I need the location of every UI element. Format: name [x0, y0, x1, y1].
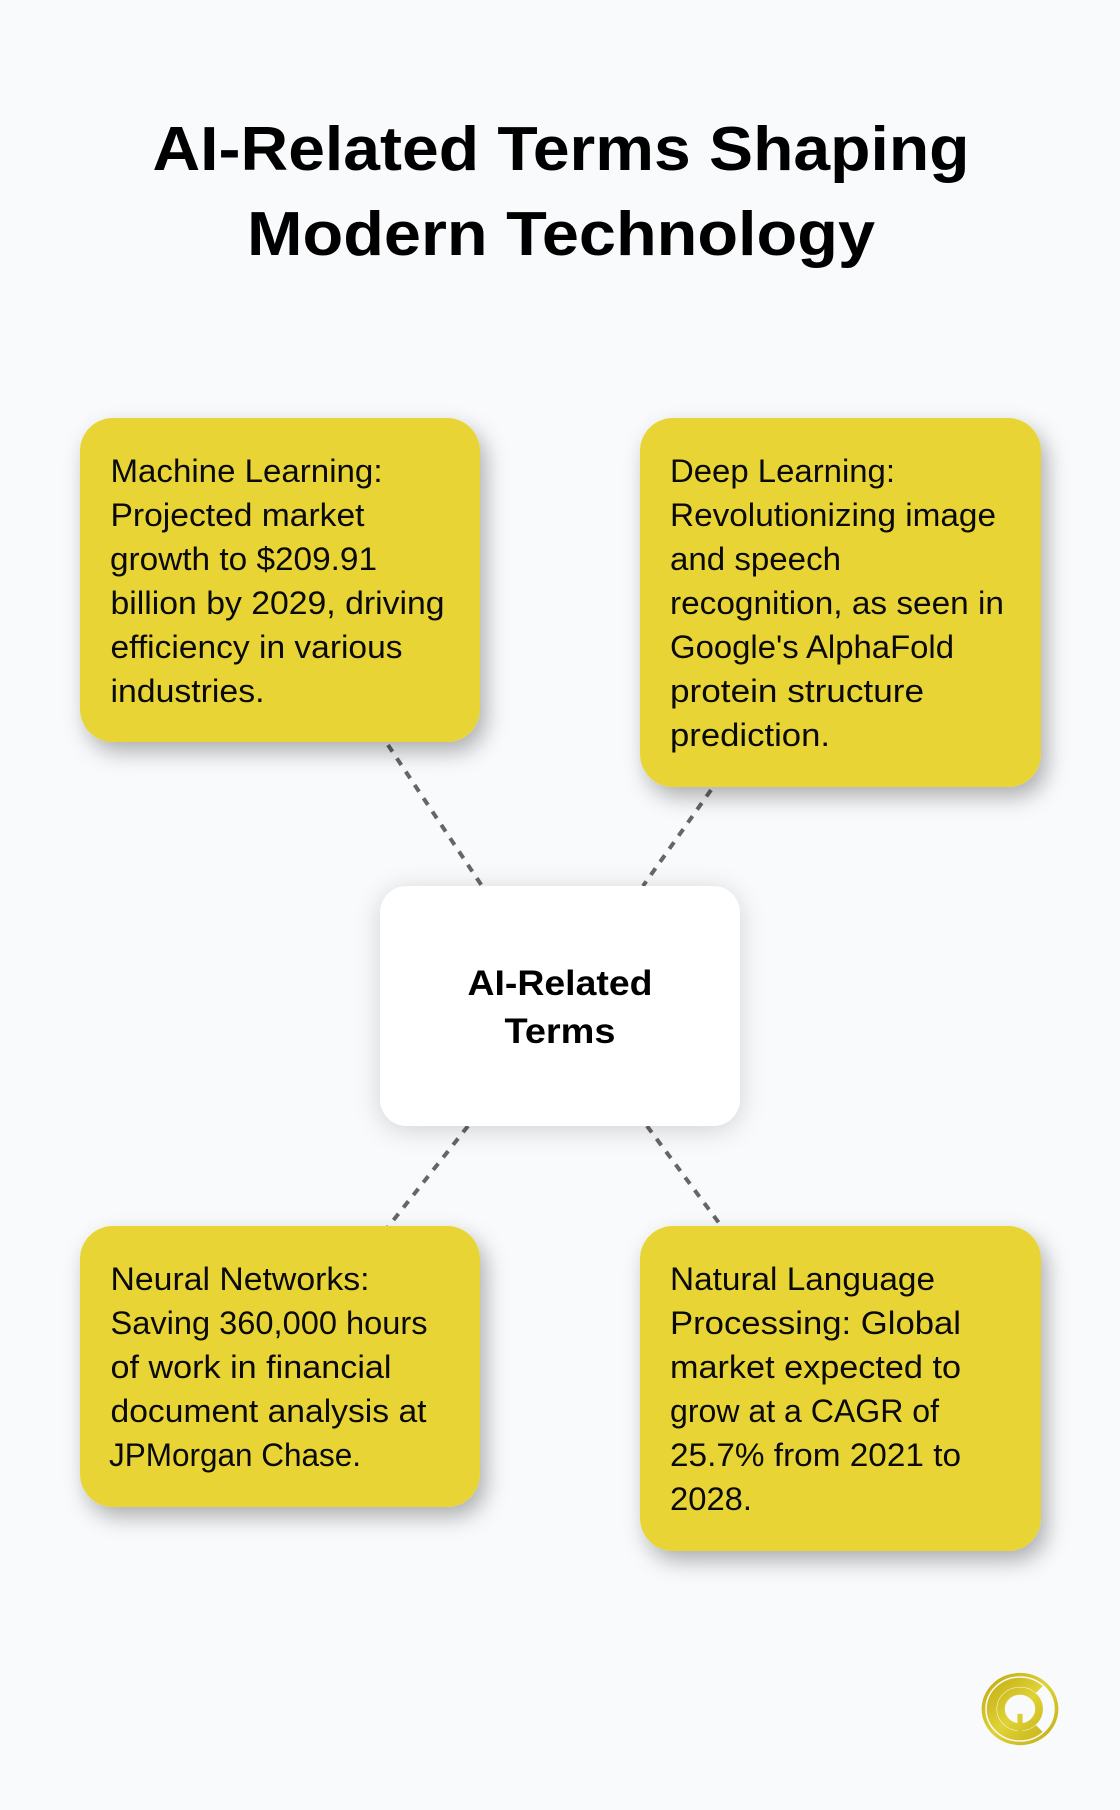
panel: center topic: AI-Related: [468, 964, 652, 1003]
panel: deep learning: Deep Learning:: [670, 453, 895, 489]
panel: deep learning: protein structure: [670, 673, 924, 709]
icon: logo: [983, 1675, 1057, 1743]
panel: neural networks: Saving 360,000 hours: [110, 1305, 428, 1341]
panel: natural language processing: grow at a CAGR of: [670, 1393, 939, 1429]
panel: natural language processing: Natural Language: [670, 1261, 935, 1297]
panel: neural networks: JPMorgan Chase.: [109, 1437, 361, 1473]
panel: center topic: [380, 886, 740, 1126]
connector: deep learning to center: [643, 790, 711, 886]
connector: neural networks to center: [388, 1126, 468, 1227]
panel: deep learning: Google's AlphaFold: [670, 629, 954, 665]
panel: natural language processing: market expected to: [670, 1349, 961, 1385]
panel: machine learning: efficiency in various: [110, 629, 402, 665]
panel: machine learning: Machine Learning:: [110, 453, 382, 489]
panel: neural networks: of work in financial: [110, 1349, 392, 1385]
panel: machine learning: growth to $209.91: [110, 541, 377, 577]
title: AI-Related Terms Shaping: [152, 115, 969, 184]
panel: machine learning: [80, 418, 480, 742]
panel: neural networks: [80, 1226, 480, 1507]
title: [152, 115, 969, 269]
panel: neural networks: document analysis at: [110, 1393, 427, 1429]
panel: machine learning: billion by 2029, driving: [110, 585, 445, 621]
panel: deep learning: Revolutionizing image: [670, 497, 996, 533]
title: Modern Technology: [247, 200, 876, 269]
panel: natural language processing: 2028.: [670, 1481, 752, 1517]
panel: machine learning: Projected market: [110, 497, 365, 533]
panel: neural networks: Neural Networks:: [110, 1261, 370, 1297]
connector: machine learning to center: [388, 745, 482, 886]
panel: deep learning: [640, 418, 1041, 787]
connector: natural language processing to center: [647, 1126, 722, 1227]
panel: natural language processing: Processing: Global: [670, 1305, 961, 1341]
panel: deep learning: recognition, as seen in: [670, 585, 1004, 621]
panel: deep learning: prediction.: [670, 717, 830, 753]
panel: natural language processing: [640, 1226, 1041, 1551]
panel: natural language processing: 25.7% from 2021 to: [670, 1437, 961, 1473]
panel: center topic: Terms: [504, 1012, 616, 1051]
panel: deep learning: and speech: [670, 541, 841, 577]
panel: machine learning: industries.: [110, 673, 264, 709]
